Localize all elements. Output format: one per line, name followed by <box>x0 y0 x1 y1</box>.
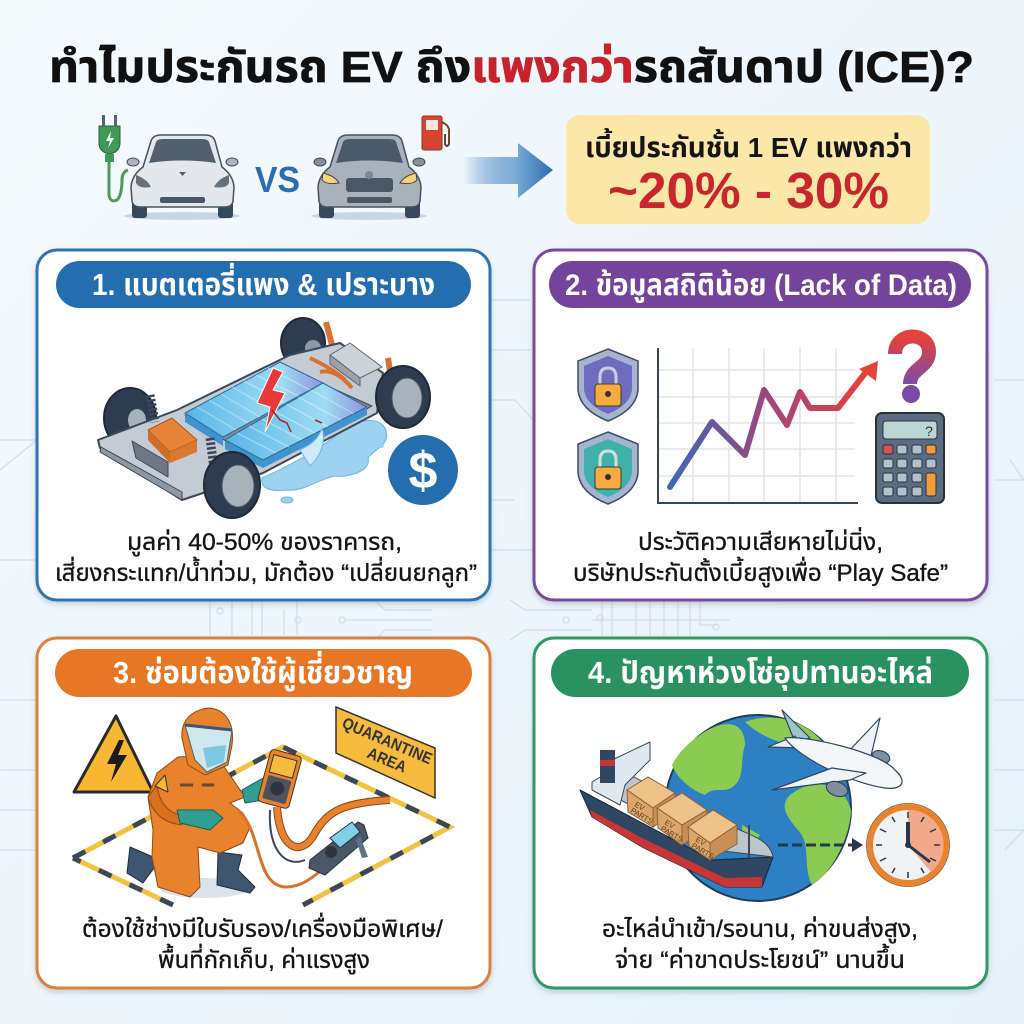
icon: purple shield <box>578 349 638 421</box>
icon: high voltage triangle <box>74 716 153 792</box>
arrow: delay path <box>778 838 863 852</box>
sign: quarantine area: AREA <box>364 745 409 777</box>
text: data description: ประวัติความเสียหายไม่นิ่ง, <box>638 526 883 556</box>
text: battery description <box>55 528 477 588</box>
text: supply chain description: จ่าย “ค่าขาดประโยชน์” นานขึ้น <box>615 943 905 974</box>
text: battery description: เสี่ยงกระแทก/น้ำท่วม, มักต้อง “เปลี่ยนยกลูก” <box>55 556 477 588</box>
comparison row <box>99 115 930 224</box>
heading: battery: 1. แบตเตอรี่แพง & เปราะบาง <box>92 262 435 302</box>
vs label: VS <box>255 159 300 200</box>
title: ทำไมประกันรถ EV ถึง แพงกว่ารถสันดาป (ICE)? <box>49 43 974 92</box>
icon: gasoline car <box>311 135 427 220</box>
text: supply chain description: อะไหล่นำเข้า/รอนาน, ค่าขนส่งสูง, <box>602 915 918 944</box>
illustration: EV parts boxes: PARTS <box>629 806 655 826</box>
illustration: cargo ship <box>580 742 773 887</box>
panel: battery <box>37 250 490 600</box>
illustration: orange cables and meter <box>238 800 390 887</box>
heading: battery <box>56 261 471 308</box>
sign: quarantine area <box>336 707 435 798</box>
icon: calculator: ? <box>925 423 933 439</box>
icon: dollar <box>388 435 458 505</box>
heading: supply chain: 4. ปัญหาห่วงโซ่อุปทานอะไหล่ <box>588 655 933 691</box>
icon: clock <box>866 804 950 886</box>
icon: teal shield <box>578 432 638 504</box>
illustration: technician in protective suit <box>127 708 293 898</box>
heading: specialist repair: 3. ซ่อมต้องใช้ผู้เชี่ยวชาญ <box>113 650 413 691</box>
heading: supply chain <box>551 649 969 697</box>
heading: lack of data <box>549 261 971 308</box>
callout: premium difference: เบี้ยประกันชั้น 1 EV แพงกว่า <box>585 127 912 163</box>
illustration: EV parts boxes: EV <box>694 835 707 848</box>
icon: electric car <box>124 135 240 220</box>
callout: premium difference: ~20% - 30% <box>608 162 889 219</box>
illustration: EV parts boxes: PARTS <box>690 841 716 861</box>
icon: calculator <box>876 413 944 503</box>
panel: specialist repair <box>37 638 490 988</box>
callout: premium difference <box>566 115 930 224</box>
text: repair description: ต้องใช้ช่างมีใบรับรอง/เครื่องมือพิเศษ/ <box>82 912 443 943</box>
icon: question mark <box>895 336 929 403</box>
text: repair description <box>82 912 443 975</box>
illustration: globe <box>665 715 851 901</box>
illustration: airplane <box>768 710 902 799</box>
illustration: EV parts boxes: PARTS <box>659 824 685 844</box>
sign: quarantine area: QUARANTINE <box>339 715 435 768</box>
illustration: EV parts boxes: EV <box>663 818 676 831</box>
illustration: EV chassis with battery <box>98 318 430 518</box>
text: data description <box>573 526 948 588</box>
text: repair description: พื้นที่กักเก็บ, ค่าแรงสูง <box>158 943 370 975</box>
text: data description: บริษัทประกันตั้งเบี้ยสูงเพื่อ “Play Safe” <box>573 556 948 588</box>
heading: specialist repair <box>55 649 472 697</box>
arrow <box>463 143 553 198</box>
quarantine floor tape <box>73 747 450 905</box>
icon: dollar: $ <box>409 442 438 500</box>
illustration: EV parts boxes: EV <box>633 800 646 813</box>
line chart <box>658 348 878 503</box>
text: battery description: มูลค่า 40-50% ของราคารถ, <box>127 528 402 557</box>
icon: ev plug <box>99 115 128 201</box>
text: supply chain description <box>602 915 918 974</box>
panel: supply chain <box>534 638 987 988</box>
illustration: EV parts boxes <box>627 777 737 861</box>
icon: fuel pump <box>422 116 449 150</box>
illustration: handheld tester <box>257 749 302 809</box>
heading: lack of data: 2. ข้อมูลสถิติน้อย (Lack of Data) <box>565 269 957 303</box>
panel: lack of data <box>534 250 987 600</box>
